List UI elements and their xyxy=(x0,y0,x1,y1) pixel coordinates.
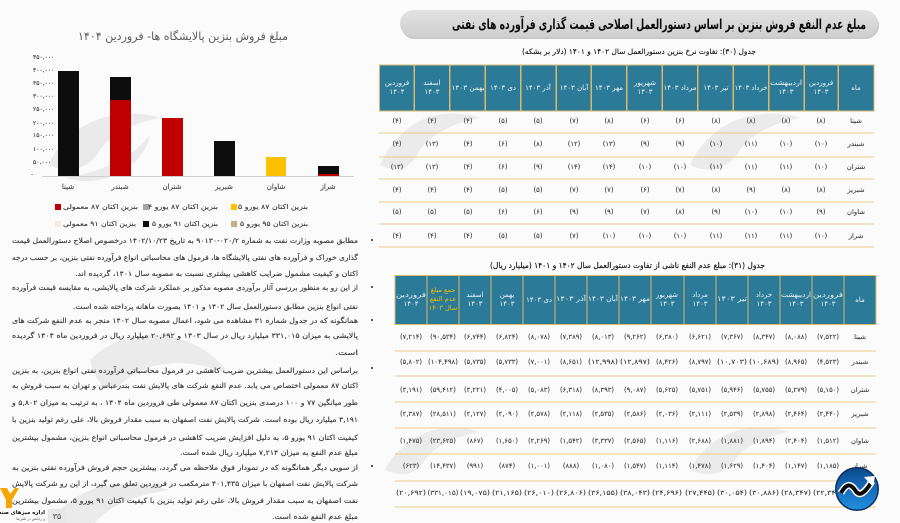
table 30 values: (۵) xyxy=(534,117,543,125)
table 30 values: (۴) xyxy=(393,186,402,194)
table 31 values: (۵,۷۳۵) xyxy=(464,358,486,366)
table 31 values: (۵,۹۴۶) xyxy=(721,386,743,394)
table 31 values: (۲۸,۵۱۱) xyxy=(430,410,456,418)
chart: gasoline sales by refinery xyxy=(31,29,354,228)
table 31 values: (۷,۳۶۷) xyxy=(721,333,743,341)
table 31 values: (۶,۶۲۱) xyxy=(689,333,711,341)
y axis labels: ۴۵۰,۰۰۰ xyxy=(33,54,54,61)
table 30 values: (۷) xyxy=(605,186,614,194)
table 30 row lines xyxy=(379,133,874,247)
table 30 values: (۱۲) xyxy=(568,140,581,148)
table 30 values: شتران xyxy=(847,163,865,171)
table 30 values: (۴) xyxy=(464,186,473,194)
table 30 values: (۴) xyxy=(393,140,402,148)
table 31 values: (۱,۰۸۰) xyxy=(592,462,614,470)
table 30 header: خرداد ۱۴۰۳ xyxy=(734,84,768,92)
table 30 values: (۸) xyxy=(534,140,543,148)
table 30 values: (۸) xyxy=(712,117,721,125)
table 31 values: (۲,۵۷۸) xyxy=(528,410,550,418)
table 30 values: (۴) xyxy=(428,232,437,240)
y axis labels: ۲۰۰,۰۰۰ xyxy=(33,120,54,127)
table 30 values: (۱۱) xyxy=(745,232,758,240)
body text: نفتی انواع بنزین مطابق دستورالعمل سال ۱۴۰۲ و ۱۴۰۱ بصورت ماهانه پرداخته شده است. xyxy=(73,302,358,311)
table 31 values: (۱,۴۰۴) xyxy=(753,462,775,470)
table 30 xyxy=(379,65,874,247)
table 31 values: (۹۰,۵۳۴) xyxy=(430,333,456,341)
table 31 values: (۵,۷۳۳) xyxy=(496,358,518,366)
table 30 values: (۵) xyxy=(499,232,508,240)
table 31 header: ۱۴۰۳ xyxy=(499,300,515,308)
body text: مبلغ عدم النفع به میزان ۷,۲۱۴ میلیارد ریال شده است. xyxy=(180,448,358,457)
table 30 values: (۹) xyxy=(534,163,543,171)
table 31 values: (۸۶۷) xyxy=(467,437,483,445)
table 30 values: (۸) xyxy=(712,186,721,194)
body text: طور میانگین ۷۷ و ۱۰۰ درصدی بنزین اکتان ۸۷ معمولی طی فروردین ماه ۱۴۰۴ ، به ترتیب به میزان ۵,۸۰۲ و xyxy=(11,398,358,407)
table 31 values: (۲,۳۸۷) xyxy=(400,410,422,418)
table 30 values: (۶) xyxy=(534,208,543,216)
table 30 values: (۴) xyxy=(393,232,402,240)
page number xyxy=(48,509,66,523)
table 30 values: (۸) xyxy=(817,186,826,194)
table 30 values: (۸) xyxy=(676,208,685,216)
chart title: مبلغ فروش بنزین پالایشگاه ها- فروردین ۱۴۰۴ xyxy=(78,29,288,44)
table 31 xyxy=(395,276,876,507)
table 30 values: (۶) xyxy=(641,117,650,125)
table 31 values: (۷,۲۱۴) xyxy=(400,333,422,341)
table 30 values: (۱۰) xyxy=(639,163,652,171)
table 31 values: (۲۳,۶۲۵) xyxy=(430,437,456,445)
table 31 header: ۱۴۰۳ xyxy=(788,300,804,308)
table 30 header: بهمن ۱۴۰۳ xyxy=(452,84,485,92)
table 31 values: (۹,۲۶۲) xyxy=(624,333,646,341)
table 30 values: شبریز xyxy=(846,186,865,194)
category labels xyxy=(62,183,336,191)
table 31 values: (۱۲,۸۹۷) xyxy=(620,358,650,366)
table 31 values: (۳۶,۱۵۵) xyxy=(588,489,618,497)
table 31 header: سال ۱۴۰۳ xyxy=(429,304,457,312)
table 31 values: (۳,۲۲۱) xyxy=(464,386,486,394)
table 31 values: (۱,۸۹۴) xyxy=(753,437,775,445)
table 31 header xyxy=(395,276,876,324)
table 31 values: (۲۶,۰۱۰) xyxy=(524,489,554,497)
table 30 values: (۱۳) xyxy=(426,140,439,148)
table 31 values: (۱,۵۱۲) xyxy=(817,437,839,445)
table 30 values: شراز xyxy=(848,232,864,240)
table 31 values: (۲,۱۱۸) xyxy=(560,410,582,418)
table 31 header: ۱۴۰۳ xyxy=(756,300,772,308)
table 31 values: (۵,۸۰۲) xyxy=(400,358,422,366)
table 30 values: (۶) xyxy=(499,208,508,216)
table 31 header: ۱۴۰۴ xyxy=(403,300,419,308)
table 30 values: شاوان xyxy=(847,208,865,216)
table 31 header: ۱۴۰۳ xyxy=(659,300,675,308)
table 31 values: (۴,۰۰۵) xyxy=(496,386,518,394)
table 31 header: شهریور xyxy=(655,291,678,299)
y axis labels xyxy=(31,54,54,178)
table 31 header: خرداد xyxy=(756,291,772,299)
table 31 values: (۳,۱۹۱) xyxy=(400,386,422,394)
table 30 values: (۱۱) xyxy=(780,232,793,240)
category labels: شراز xyxy=(319,183,336,191)
table 31 header: تیر ۱۴۰۳ xyxy=(717,295,747,303)
table 30 values: (۱۳) xyxy=(426,163,439,171)
table 30 values: (۹) xyxy=(676,140,685,148)
category labels: شبندر xyxy=(110,183,129,191)
table 30 values: (۴) xyxy=(464,140,473,148)
body text xyxy=(11,236,359,521)
table 31 values: (۱,۱۱۶) xyxy=(656,437,678,445)
table 31 values: (۷,۰۰۱) xyxy=(528,358,550,366)
table 30 values: (۱۰) xyxy=(639,232,652,240)
body text: است. xyxy=(335,348,358,357)
table 31 values: (۱۲,۹۹۸) xyxy=(588,358,618,366)
table 31 values: شینا xyxy=(854,333,866,341)
table 31 values: (۸,۰۷۸) xyxy=(528,333,550,341)
table 31 values: (۹,۰۸۷) xyxy=(624,386,646,394)
table 30 values: (۵) xyxy=(534,186,543,194)
table 30 header: آبان ۱۴۰۳ xyxy=(560,83,589,92)
table 31 header: ۱۴۰۳ xyxy=(692,300,708,308)
body text: ۳,۱۹۱ میلیارد ریال بوده است. شرکت پالایش نفت اصفهان به سبب مقدار فروش بالا، علی رغم تولید بنزین با xyxy=(12,415,358,424)
table 31 values: (۲,۴۴۰) xyxy=(817,410,839,418)
bars xyxy=(42,71,354,177)
table 31 values: (۲۶,۸۰۶) xyxy=(556,489,586,497)
table 30 values: (۱۱) xyxy=(710,232,723,240)
table 30 values: (۸) xyxy=(782,117,791,125)
table 31 values: شبندر xyxy=(851,358,869,366)
table 31 values: (۴,۵۲۳) xyxy=(817,358,839,366)
table 30 values: (۱۳) xyxy=(603,140,616,148)
caption: table 30: جدول (۳۰): تفاوت نرخ بنزین دستورالعمل سال ۱۴۰۲ و ۱۴۰۱ (دلار بر بشکه) xyxy=(522,47,756,56)
body text: براساس این دستورالعمل بیشترین ضریب کاهشی در فرمول محاسباتی فرآورده نفتی انواع بنزین، به بنزین xyxy=(12,365,358,375)
table 31 header: ۱۴۰۳ xyxy=(820,300,836,308)
table 30 values: (۶) xyxy=(499,163,508,171)
table 30 values: (۱۰) xyxy=(780,208,793,216)
icon: publisher logo xyxy=(0,488,45,521)
table 30 values: (۴) xyxy=(464,232,473,240)
table 31 values: (۸,۰۱۳) xyxy=(592,333,614,341)
table 30 header: فروردین xyxy=(385,79,409,87)
table 30 header: مرداد ۱۴۰۳ xyxy=(664,84,697,92)
table 31 values: (۱۰۴,۴۹۸) xyxy=(428,358,458,366)
table 30 values: (۵) xyxy=(393,208,402,216)
table 31 values: (۵۹,۴۱۲) xyxy=(430,386,456,394)
body text: کیفیت اکتان ۹۱ یورو ۵، به دلیل افزایش ضریب کاهشی در فرمول محاسباتی انواع بنزین، مشمول بیشترین xyxy=(12,433,359,442)
y axis labels: ۱۵۰,۰۰۰ xyxy=(33,132,54,139)
category labels: شتران xyxy=(163,183,182,191)
table 30 values: (۷) xyxy=(570,117,579,125)
table 31 header: ماه xyxy=(855,296,865,304)
table 31 values: شراز xyxy=(852,462,868,470)
table 31 values: (۷,۳۸۹) xyxy=(560,333,582,341)
table 31 values: (۶,۸۲۴) xyxy=(496,333,518,341)
table 30 values: (۱۰) xyxy=(745,208,758,216)
table 30 header: ۱۴۰۴ xyxy=(389,88,405,96)
icon: round blue logo with arrow xyxy=(835,467,879,511)
table 30 values: (۱۰) xyxy=(815,232,828,240)
y axis labels: ۲۵۰,۰۰۰ xyxy=(33,106,54,113)
y axis labels: ۳۵۰,۰۰۰ xyxy=(33,80,54,87)
table 31 values: (۸,۳۹۳) xyxy=(592,386,614,394)
table 30 values: (۹) xyxy=(605,208,614,216)
table 31 values: (۸,۳۴۷) xyxy=(753,333,775,341)
table 31 values: (۵,۷۵۱) xyxy=(689,386,711,394)
table 31 values xyxy=(396,333,869,497)
table 31 values: (۲,۲۶۹) xyxy=(528,437,550,445)
legend: بنزین اکتان ۸۷ معمولی xyxy=(63,203,138,211)
legend: بنزین اکتان ۹۱ یورو ۵ xyxy=(152,220,218,228)
table 31 values: (۸,۹۶۵) xyxy=(785,358,807,366)
category labels: شینا xyxy=(62,183,74,191)
table 31 values: (۲,۴۰۴) xyxy=(785,437,807,445)
table 31 values: (۳۳۱,۰۱۵) xyxy=(428,489,459,497)
table 31 values: (۹۹۱) xyxy=(467,462,483,470)
table 31 header: فروردین xyxy=(813,291,843,299)
table 30 values: (۱۰) xyxy=(674,163,687,171)
table 30 values: (۶) xyxy=(641,186,650,194)
table 30 values: (۴) xyxy=(428,117,437,125)
table 31 values: (۱۰,۶۸۹) xyxy=(749,358,779,366)
table 30 header: دی ۱۴۰۳ xyxy=(490,84,516,92)
table 31 values: (۱۴,۴۳۷) xyxy=(430,462,456,470)
table 30 values: (۱۰) xyxy=(674,232,687,240)
watermark xyxy=(48,113,800,523)
table 30 values: (۷) xyxy=(641,208,650,216)
table 31 values: (۲,۶۸۸) xyxy=(689,437,711,445)
table 30 values: (۵) xyxy=(428,208,437,216)
body text: شرکت پالایش نفت اصفهان با میزان ۴۰۱,۴۳۵ مترمکعب در فروردین تعلق می گیرد، از این رو شرکت پالایش xyxy=(12,479,358,488)
table 31 values: (۸۷۴) xyxy=(499,462,515,470)
table 30 values: (۹) xyxy=(747,186,756,194)
table 30 header: ۱۴۰۳ xyxy=(424,88,440,96)
table 30 header: ۱۴۰۳ xyxy=(778,88,794,96)
table 31 values: (۸۸۸) xyxy=(563,462,579,470)
table 30 values: (۶) xyxy=(676,117,685,125)
table 30 header: آذر ۱۴۰۳ xyxy=(525,83,552,92)
table 31 values: (۲,۰۹۰) xyxy=(496,410,518,418)
table 31 values: (۳۰,۰۵۴) xyxy=(717,489,747,497)
table 30 values: (۹) xyxy=(570,208,579,216)
body text: از این رو به منظور بررسی آثار برآوردی مصوبه مذکور بر عملکرد شرکت های پالایشی، به مقایسه قیمت فرآورده xyxy=(12,282,358,292)
y axis labels: ۵۰,۰۰۰ xyxy=(33,159,51,166)
table 30 header: ۱۴۰۳ xyxy=(813,88,829,96)
table 30 values: (۵) xyxy=(464,208,473,216)
table 31 values: (۸,۷۹۷) xyxy=(689,358,711,366)
body text: مبلغ عدم النفع شده است. xyxy=(272,512,358,521)
legend xyxy=(55,203,308,228)
table 31 header: آبان ۱۴۰۳ xyxy=(588,294,619,303)
table 31 values: (۵,۶۲۵) xyxy=(656,386,678,394)
table 31 values: (۵,۲۷۹) xyxy=(785,386,807,394)
y axis labels: - xyxy=(31,171,33,178)
table 30 values: (۸) xyxy=(747,117,756,125)
table 31 header: عدم النفع xyxy=(430,295,456,303)
table 31 header: جمع مبلغ xyxy=(431,286,455,294)
table 30 header: شهریور xyxy=(633,79,656,87)
table 30 values: (۵) xyxy=(499,186,508,194)
table 31 values: شبریز xyxy=(850,410,869,418)
table 31 values: (۲۱,۱۶۵) xyxy=(492,489,522,497)
body text: از سویی دیگر همانگونه که در نمودار فوق ملاحظه می گردد، بیشترین حجم فروش فرآورده نفتی بنزین به xyxy=(12,462,358,472)
body text: گذاری خوراک و فرآورده های نفتی پالایشگاه ها، فرمول های محاسباتی انواع فرآورده نفتی بنزین، بر حسب درجه xyxy=(12,252,359,262)
table 31 header: مرداد xyxy=(692,291,708,299)
body text: پالایشی به میزان ۳۳۱,۰۱۵ میلیارد ریال در سال ۱۴۰۳ و ۲۰,۶۹۲ میلیارد ریال در فروردین ماه ۱۴۰۴ گردیده xyxy=(12,331,358,340)
table 31 values: (۳۸,۰۴۳) xyxy=(620,489,650,497)
table 31 values: (۱,۵۴۲) xyxy=(560,437,582,445)
table 30 header: اسفند xyxy=(423,79,441,87)
legend: بنزین اکتان ۸۷ یورو ۵ xyxy=(238,203,308,211)
table 30 values xyxy=(391,117,865,240)
table 31 values: (۵,۰۸۳) xyxy=(528,386,550,394)
legend: بنزین اکتان ۹۱ معمولی xyxy=(63,220,136,228)
table 31 values: شتران xyxy=(851,386,869,394)
table 30 values: (۴) xyxy=(428,186,437,194)
table 30 values: (۸) xyxy=(782,186,791,194)
table 31 values: (۲,۱۲۷) xyxy=(464,410,486,418)
table 30 values: (۱۰) xyxy=(710,140,723,148)
table 31 values: (۱,۶۵۰) xyxy=(496,437,518,445)
table 30 values: (۷) xyxy=(676,186,685,194)
table 31 values: (۲,۵۸۶) xyxy=(624,410,646,418)
table 30 values: (۴) xyxy=(393,117,402,125)
table 31 values: (۲,۸۹۸) xyxy=(753,410,775,418)
table 30 values: (۵) xyxy=(499,117,508,125)
table 30 values: شینا xyxy=(850,117,862,125)
table 30 header xyxy=(380,65,874,111)
table 31 row lines xyxy=(395,351,876,507)
table 31 values: (۱,۶۲۹) xyxy=(721,462,743,470)
table 31 values: (۸,۶۵۱) xyxy=(560,358,582,366)
table 30 values: (۱۰) xyxy=(815,163,828,171)
table 30 values: (۵) xyxy=(534,232,543,240)
table 30 header: اردیبهشت xyxy=(770,79,802,87)
table 31 values: (۱,۰۰۱) xyxy=(528,462,550,470)
table 30 values: (۱۱) xyxy=(780,163,793,171)
table 31 values: (۵,۱۵۰) xyxy=(817,386,839,394)
table 30 values: شبندر xyxy=(847,140,865,148)
table 30 values: (۱۱) xyxy=(745,140,758,148)
table 31 header: آذر ۱۴۰۳ xyxy=(556,294,587,303)
table 30 header: فروردین xyxy=(809,79,833,87)
table 30 values: (۸) xyxy=(605,117,614,125)
table 30 values: (۱۱) xyxy=(710,163,723,171)
bullets xyxy=(371,239,373,467)
table 31 header: دی ۱۴۰۳ xyxy=(526,296,552,304)
table 30 values: (۱۱) xyxy=(745,163,758,171)
page number: ۳۵ xyxy=(53,512,61,521)
table 31 values: (۶,۷۴۴) xyxy=(464,333,486,341)
table 31 header: اردیبهشت xyxy=(781,291,811,299)
category labels: شاوان xyxy=(267,183,285,191)
table 31 values: (۲,۵۶۵) xyxy=(624,437,646,445)
table 30 values: (۹) xyxy=(712,208,721,216)
table 30 header: ۱۴۰۳ xyxy=(637,88,653,96)
table 31 header: فروردین xyxy=(396,291,426,299)
table 31 values: (۶,۳۸۰) xyxy=(656,333,678,341)
table 30 values: (۷) xyxy=(570,186,579,194)
table 31 values: شاوان xyxy=(851,437,869,445)
category labels: شبریز xyxy=(214,183,233,191)
table 31 values: (۱,۸۸۱) xyxy=(721,437,743,445)
table 31 values: (۲۲,۳۴۲) xyxy=(813,489,843,497)
table 30 values: (۱۳) xyxy=(391,163,404,171)
table 31 values: (۱,۱۴۷) xyxy=(785,462,807,470)
table 30 values: (۱۰) xyxy=(780,140,793,148)
table 30 values: (۹) xyxy=(817,208,826,216)
table 31 values: (۶۲۳) xyxy=(403,462,419,470)
table 31 values: (۲,۵۳۹) xyxy=(721,410,743,418)
table 30 values: (۴) xyxy=(464,117,473,125)
y axis labels: ۱۰۰,۰۰۰ xyxy=(33,146,54,153)
table 31 values: (۲,۱۱۱) xyxy=(689,410,711,418)
body text: اکتان و کیفیت مشمول ضرایب کاهشی بیشتری نسبت به مصوبه سال ۱۴۰۱، گردیده اند. xyxy=(75,269,358,278)
table 31 values: (۲۷,۴۴۵) xyxy=(685,489,715,497)
table 31 values: (۸,۴۲۶) xyxy=(656,358,678,366)
table 30 header: تیر ۱۴۰۳ xyxy=(703,84,729,92)
table 31 values: (۸,۰۸۸) xyxy=(785,333,807,341)
caption: table 31: جدول (۳۱): مبلغ عدم النفع ناشی از تفاوت دستورالعمل سال ۱۴۰۲ و ۱۴۰۱ (میلیارد ریال) xyxy=(490,261,765,270)
legend: بنزین اکتان ۹۵ یورو ۵ xyxy=(240,220,308,228)
table 31 header: ۱۴۰۳ xyxy=(467,300,483,308)
table 30 header: ماه xyxy=(851,84,861,92)
table 31 values: (۲۴,۶۹۶) xyxy=(652,489,682,497)
page title banner xyxy=(400,10,879,39)
table 31 values: (۲۸,۳۴۷) xyxy=(781,489,811,497)
table 30 values: (۱۴) xyxy=(603,163,616,171)
body text: مطابق مصوبه وزارت نفت به شماره ۰۲۰/۲-۹۰۱۳۰ به تاریخ ۱۴۰۲/۱۰/۲۳ درخصوص اصلاح دستورالعمل قیمت xyxy=(12,236,358,245)
icon: publisher logo: و رایانش در تلفن‌ها xyxy=(16,517,45,521)
table 31 values: (۱۹,۰۷۵) xyxy=(460,489,490,497)
table 31 values: (۱۰,۷۰۳) xyxy=(717,358,747,366)
table 31 values: (۱,۱۸۵) xyxy=(817,462,839,470)
table 30 values: (۱۰) xyxy=(815,140,828,148)
legend: بنزین اکتان ۸۷ یورو ۴ xyxy=(148,203,218,211)
table 31 values: (۶,۳۱۸) xyxy=(560,386,582,394)
body text: همانگونه که در جدول شماره ۳۱ مشاهده می شود، اعمال مصوبه سال ۱۴۰۲ منجر به عدم النفع شرکت های xyxy=(12,316,358,325)
table 30 values: (۹) xyxy=(641,140,650,148)
table 31 values: (۷,۵۲۲) xyxy=(817,333,839,341)
table 31 values: (۳,۳۳۷) xyxy=(592,437,614,445)
table 31 values: (۱,۱۱۴) xyxy=(656,462,678,470)
table 31 header: مهر ۱۴۰۳ xyxy=(620,295,650,303)
table 30 values: (۴) xyxy=(464,163,473,171)
table 31 values: (۳۰,۸۸۶) xyxy=(749,489,779,497)
table 30 values: (۱۰) xyxy=(603,232,616,240)
table 31 header: اسفند xyxy=(466,291,484,299)
table 31 values: (۱,۴۷۸) xyxy=(689,462,711,470)
table 30 values: (۱۴) xyxy=(568,163,581,171)
table 31 values: (۱,۵۴۷) xyxy=(624,462,646,470)
table 31 values: (۲۰,۶۹۲) xyxy=(396,489,426,497)
table 31 values: (۲,۵۳۵) xyxy=(592,410,614,418)
table 31 values: (۵,۷۵۵) xyxy=(753,386,775,394)
table 30 values: (۷) xyxy=(570,232,579,240)
table 30 values: (۶) xyxy=(499,140,508,148)
table 31 values: (۱,۴۷۵) xyxy=(400,437,422,445)
table 30 header: مهر ۱۴۰۳ xyxy=(595,84,623,92)
table 31 values: (۲,۴۶۴) xyxy=(785,410,807,418)
table 31 values: (۲,۰۳۶) xyxy=(656,410,678,418)
body text: اکتان ۸۷ معمولی اختصاص می یابد. عدم النفع شرکت های پالایش نفت بندرعباس و تهران به سبب فروش به xyxy=(12,381,358,390)
y axis labels: ۳۰۰,۰۰۰ xyxy=(33,93,54,100)
y axis labels: ۴۰۰,۰۰۰ xyxy=(33,67,54,74)
body text: نفت اصفهان به سبب مقدار فروش بالا، علی رغم تولید بنزین با کیفیت اکتان ۹۱ یورو ۵، مشمول بیشترین xyxy=(12,496,358,505)
table 30 values: (۸) xyxy=(817,117,826,125)
table 31 header: بهمن xyxy=(500,291,514,299)
